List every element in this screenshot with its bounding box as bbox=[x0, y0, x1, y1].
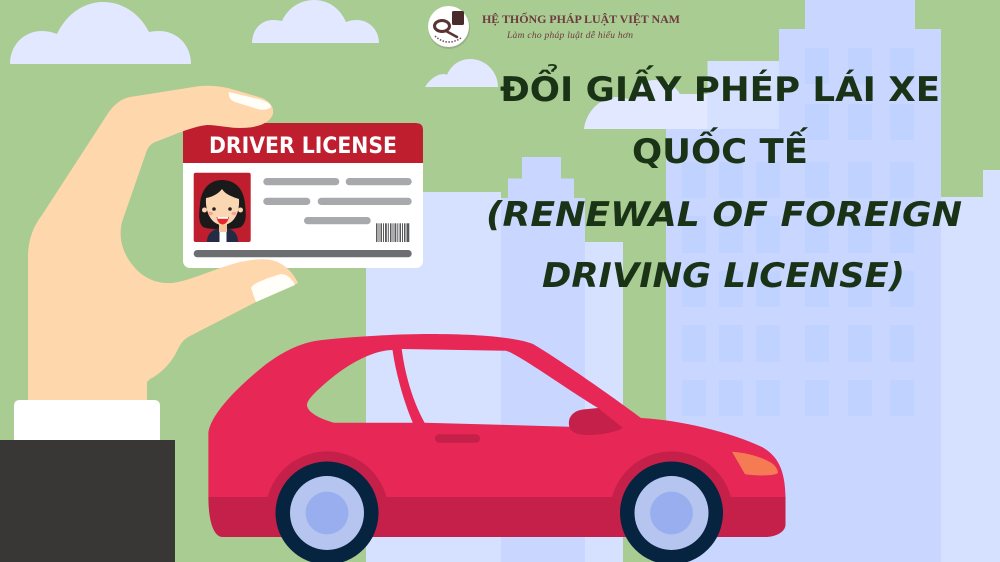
logo emblem bbox=[428, 6, 470, 49]
driver license card bbox=[183, 123, 423, 268]
buildings: skyline bbox=[366, 0, 1000, 562]
shirt cuff bbox=[14, 400, 160, 440]
title: (RENEWAL OF FOREIGN bbox=[486, 195, 962, 235]
building windows bbox=[682, 48, 914, 416]
portrait photo of woman bbox=[194, 173, 251, 242]
title: ĐỔI GIẤY PHÉP LÁI XE bbox=[500, 63, 940, 110]
card header text: DRIVER LICENSE bbox=[209, 134, 397, 159]
cloud: top centre left bbox=[252, 0, 379, 43]
red car bbox=[208, 334, 785, 562]
fingernail bbox=[229, 92, 271, 110]
cloud: top left large bbox=[10, 2, 191, 64]
logo name text: HỆ THỐNG PHÁP LUẬT VIỆT NAM bbox=[482, 11, 680, 26]
side mirror bbox=[569, 408, 623, 435]
cloud: behind title bbox=[584, 61, 779, 129]
hand holding card bbox=[28, 86, 298, 402]
headlight bbox=[732, 452, 778, 475]
title bbox=[486, 63, 962, 296]
thumbnail bbox=[251, 274, 295, 302]
card info bars bbox=[263, 178, 412, 224]
rear wheel bbox=[268, 451, 386, 562]
title: DRIVING LICENSE) bbox=[542, 256, 905, 296]
suit sleeve bbox=[0, 440, 175, 562]
barcode bbox=[376, 223, 409, 242]
title: QUỐC TẾ bbox=[632, 127, 809, 172]
car lower panel bbox=[208, 497, 785, 537]
door handle bbox=[435, 434, 480, 443]
car body with window cutouts bbox=[208, 334, 785, 497]
card bottom bar bbox=[194, 250, 412, 257]
cloud: small under logo bbox=[425, 59, 498, 87]
front wheel bbox=[612, 451, 731, 562]
card red header bbox=[183, 123, 423, 163]
logo tagline text: Làm cho pháp luật dễ hiểu hơn bbox=[506, 30, 633, 41]
